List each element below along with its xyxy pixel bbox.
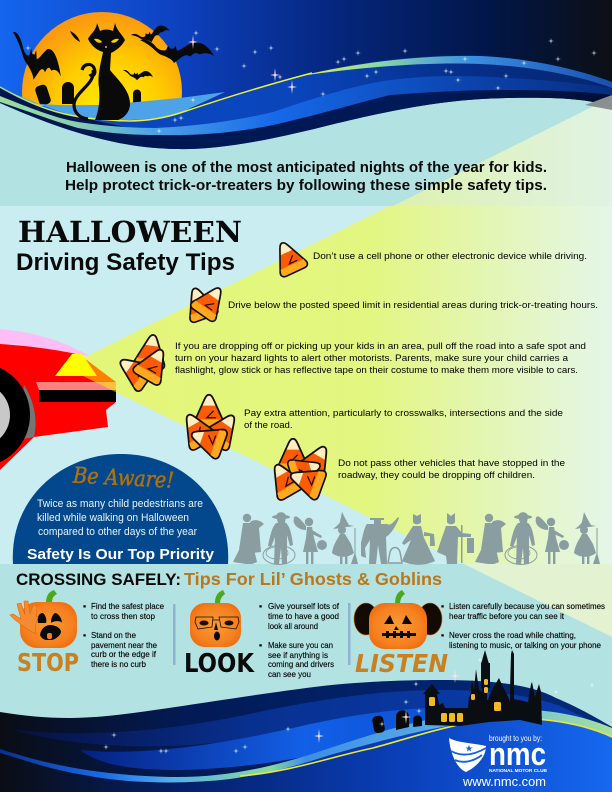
title: Halloween: HALLOWEEN xyxy=(18,215,242,249)
bullets: look: can see you xyxy=(268,669,311,679)
bullets: stop: to cross then stop xyxy=(91,611,155,621)
panel: lower section background xyxy=(0,564,612,792)
be aware text: Twice as many child pedestrians are xyxy=(37,498,203,510)
silhouettes of trick-or-treaters xyxy=(233,512,600,565)
bullets: listen xyxy=(441,601,606,650)
tombstones xyxy=(34,82,141,106)
bullets: look: ▪ xyxy=(259,640,262,650)
panel: driving safety tips background xyxy=(0,206,612,564)
safety priority: Safety Is Our Top Priority xyxy=(27,546,215,563)
stars top xyxy=(25,30,597,134)
tip 5 xyxy=(263,439,565,502)
headlight beam, lower section xyxy=(464,564,612,637)
bullets: look: ▪ xyxy=(259,601,262,611)
bullets: listen: listening to music, or talking on your phone xyxy=(449,640,601,650)
divider one xyxy=(173,604,176,665)
wave corner beam xyxy=(585,95,612,110)
intro text xyxy=(65,160,547,194)
tip 3: flashlight, glow stick or has reflective tape on their costume to make them more visible to cars. xyxy=(175,365,578,376)
bullets: look: see if anything is xyxy=(268,650,329,660)
bullets: stop: ▪ xyxy=(83,601,86,611)
tip 4: Pay extra attention, particularly to crosswalks, intersections and the side xyxy=(244,408,563,419)
tip 1 xyxy=(269,237,587,278)
nmc logo: NATIONAL MOTOR CLUB xyxy=(489,768,548,773)
pumpkin: listen xyxy=(354,590,442,649)
headlight beam xyxy=(65,206,612,564)
bats xyxy=(11,21,214,89)
intro text: Help protect trick-or-treaters by following these simple safety tips. xyxy=(65,178,547,194)
tip 3: If you are dropping off or picking up your kids in an area, pull off the road into a safe spot and xyxy=(175,341,586,352)
tip 5: Do not pass other vehicles that have stopped in the xyxy=(338,458,565,469)
intro text: Halloween is one of the most anticipated nights of the year for kids. xyxy=(66,160,547,176)
nmc logo xyxy=(449,734,548,789)
castle silhouette xyxy=(423,650,542,726)
moon foreground cat xyxy=(74,23,130,120)
tip 3 xyxy=(112,333,586,393)
bullets: look: look all around xyxy=(268,621,318,631)
headlight beam, top section xyxy=(393,97,612,206)
nmc logo: www.nmc.com xyxy=(462,774,546,789)
bullets: stop: Stand on the xyxy=(91,630,136,640)
tip 2: Drive below the posted speed limit in residential areas during trick-or-treating hours. xyxy=(228,300,598,311)
listen label: LISTEN xyxy=(355,649,448,678)
top wave xyxy=(0,56,612,149)
be aware text: killed while walking on Halloween xyxy=(37,512,189,524)
bullets: look: Give yourself lots of xyxy=(268,601,340,611)
nmc logo: brought to you by: xyxy=(489,734,542,743)
bottom wave xyxy=(0,680,612,792)
bullets: listen: Never cross the road while chatting, xyxy=(449,630,576,640)
bullets: look xyxy=(259,601,340,679)
tip 4: of the road. xyxy=(244,420,293,431)
divider two xyxy=(348,603,350,665)
bullets: look: coming and drivers xyxy=(268,659,335,669)
bullets: stop: curb or the edge if xyxy=(91,649,157,659)
stars bottom xyxy=(103,657,595,754)
crossing safely heading: CROSSING SAFELY: xyxy=(16,571,181,589)
tip 3: turn on your hazard lights to alert other motorists. Parents, make sure your child carries a xyxy=(175,353,569,364)
bullets: look: Make sure you can xyxy=(268,640,333,650)
bullets: listen: ▪ xyxy=(441,601,444,611)
bullets: stop: pavement near the xyxy=(91,640,157,650)
moon xyxy=(22,12,182,106)
shield xyxy=(449,738,486,772)
subtitle: driving safety tips: Driving Safety Tips xyxy=(16,249,235,276)
crossing safely heading: Tips For Lil’ Ghosts & Goblins xyxy=(184,569,442,589)
pumpkin: look xyxy=(190,590,241,647)
bullets: stop: ▪ xyxy=(83,630,86,640)
car xyxy=(0,329,116,470)
bullets: stop: there is no curb xyxy=(91,659,146,669)
look label: LOOK xyxy=(184,649,255,679)
bullets: listen: hear traffic before you can see it xyxy=(449,611,565,621)
bullets: look: time to have a good xyxy=(268,611,339,621)
crossing safely heading xyxy=(16,569,442,589)
bullets: stop xyxy=(83,601,164,669)
bullets: stop: Find the safest place xyxy=(91,601,164,611)
tip 5: roadway, they could be dropping off children. xyxy=(338,470,535,481)
tombstones bottom xyxy=(372,710,422,734)
stop label: STOP xyxy=(17,648,79,677)
be aware heading: Be Aware! xyxy=(72,464,175,494)
tip 1: Don’t use a cell phone or other electronic device while driving. xyxy=(313,251,587,262)
bullets: listen: ▪ xyxy=(441,630,444,640)
sky header xyxy=(0,0,612,149)
be aware text: compared to other days of the year xyxy=(38,526,197,538)
be aware text xyxy=(37,498,203,538)
tip 4 xyxy=(175,395,563,460)
tip 2 xyxy=(181,280,598,323)
blue callout: be aware background xyxy=(13,454,228,564)
pumpkin: stop xyxy=(10,590,77,648)
nmc logo: nmc xyxy=(489,736,546,772)
